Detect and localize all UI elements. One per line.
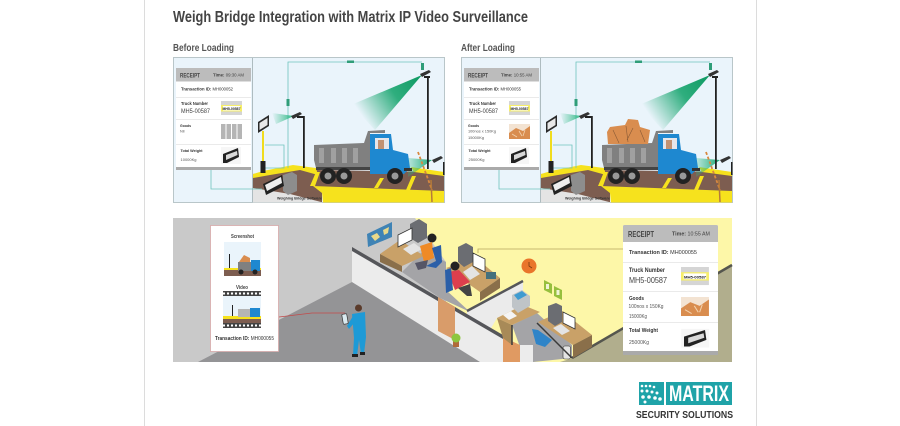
label: video: Video: [236, 285, 248, 291]
receipt before: 10000Kg: [180, 157, 196, 162]
receipt before: Time: 09:30 AM: [213, 72, 244, 78]
receipt: large: [623, 225, 718, 355]
panel: after loading: [462, 58, 732, 202]
clock: [522, 258, 536, 274]
receipt before: Goods: [180, 123, 192, 128]
wall map: [367, 222, 392, 247]
receipt before: Total Weight: [180, 148, 203, 153]
receipt: large: Goods: [629, 296, 644, 302]
operator 2: [445, 262, 472, 296]
heading: before loading: Before Loading: [173, 42, 234, 54]
connector to receipt: [478, 249, 623, 253]
receipt before: Nil: [180, 130, 185, 134]
label: weighing bridge software: Weighing Bridge Software: [277, 196, 323, 200]
thumbnail: video filmstrip: [223, 291, 261, 328]
receipt after: Goods: [468, 123, 480, 128]
desk 3: [532, 303, 592, 359]
door: [438, 297, 455, 340]
receipt: large: 25000Kg: [629, 340, 649, 346]
panel: screenshot and video: [210, 226, 278, 352]
receipt: large: MH5-00587: [684, 276, 706, 280]
truck loaded: [602, 119, 700, 184]
yellow back wall: [415, 218, 732, 362]
receipt: large: 15000Kg: [629, 314, 647, 320]
receipt: large: RECEIPT: [628, 230, 654, 239]
receipt: large: 100nos x 150Kg: [628, 304, 664, 310]
receipt after: 100nos x 150Kg: [468, 130, 496, 134]
receipt: large: Total Weight: [629, 328, 658, 334]
plant: [452, 334, 460, 347]
receipt: large: Transaction ID: MH000055: [629, 250, 697, 256]
page borders: [144, 0, 757, 426]
receipt: large: Time: 10:55 AM: [672, 232, 710, 238]
white wall by door: [520, 345, 533, 362]
wall frames: [544, 280, 562, 300]
receipt: large: Truck Number: [629, 268, 666, 274]
bin: [563, 346, 570, 359]
logo: matrix: MATRIX: [669, 381, 729, 406]
receipt after: Truck Number: [469, 101, 496, 107]
receipt after: 15000Kg: [468, 136, 484, 140]
label: weighing bridge software: Weighing Bridge Software: [565, 196, 611, 200]
receipt before: [176, 68, 251, 170]
chair: [532, 329, 552, 347]
cubicle floor: [512, 313, 572, 362]
receipt after: Total Weight: [468, 148, 491, 153]
thumbnail: screenshot: [224, 242, 261, 276]
desk 2: [445, 243, 500, 301]
logo: matrix: SECURITY SOLUTIONS: [636, 410, 733, 421]
desk 1: [380, 219, 442, 272]
printer desk: [497, 290, 540, 345]
receipt before: MH5-00587: [222, 107, 241, 111]
receipt after: MH5-00587: [510, 107, 529, 111]
transaction id: Transaction ID: MH000055: [215, 336, 274, 342]
dark edges of cubicle: [512, 323, 572, 358]
receipt after: MH5-00587: [469, 108, 498, 115]
receipt before: RECEIPT: [180, 72, 200, 80]
panel: office scene: [173, 218, 732, 362]
title: Weigh Bridge Integration with Matrix IP Video Surveillance: [173, 9, 528, 26]
receipt after: Time: 10:55 AM: [501, 72, 532, 78]
inner white partition: [467, 281, 523, 330]
heading: after loading: After Loading: [461, 42, 515, 54]
label: screenshot: Screenshot: [231, 234, 254, 240]
partition wall: [352, 249, 503, 362]
operator 1: [415, 234, 442, 270]
receipt: large: MH5-00587: [629, 275, 667, 285]
connector to tablet: [279, 313, 345, 317]
person with tablet: [342, 304, 366, 357]
truck empty: [314, 130, 412, 184]
receipt before: Transaction ID: MH000052: [181, 86, 233, 92]
receipt after: Transaction ID: MH000055: [469, 86, 521, 92]
logo: matrix: [636, 381, 733, 421]
main floor: [198, 282, 490, 362]
receipt after: 25000Kg: [468, 157, 484, 162]
receipt before: MH5-00587: [181, 108, 210, 115]
receipt after: RECEIPT: [468, 72, 488, 80]
panel: before loading: [174, 58, 444, 202]
receipt before: Truck Number: [181, 101, 208, 107]
olive corner floor: [560, 266, 732, 362]
office floor: [402, 250, 470, 312]
receipt after: [464, 68, 539, 170]
